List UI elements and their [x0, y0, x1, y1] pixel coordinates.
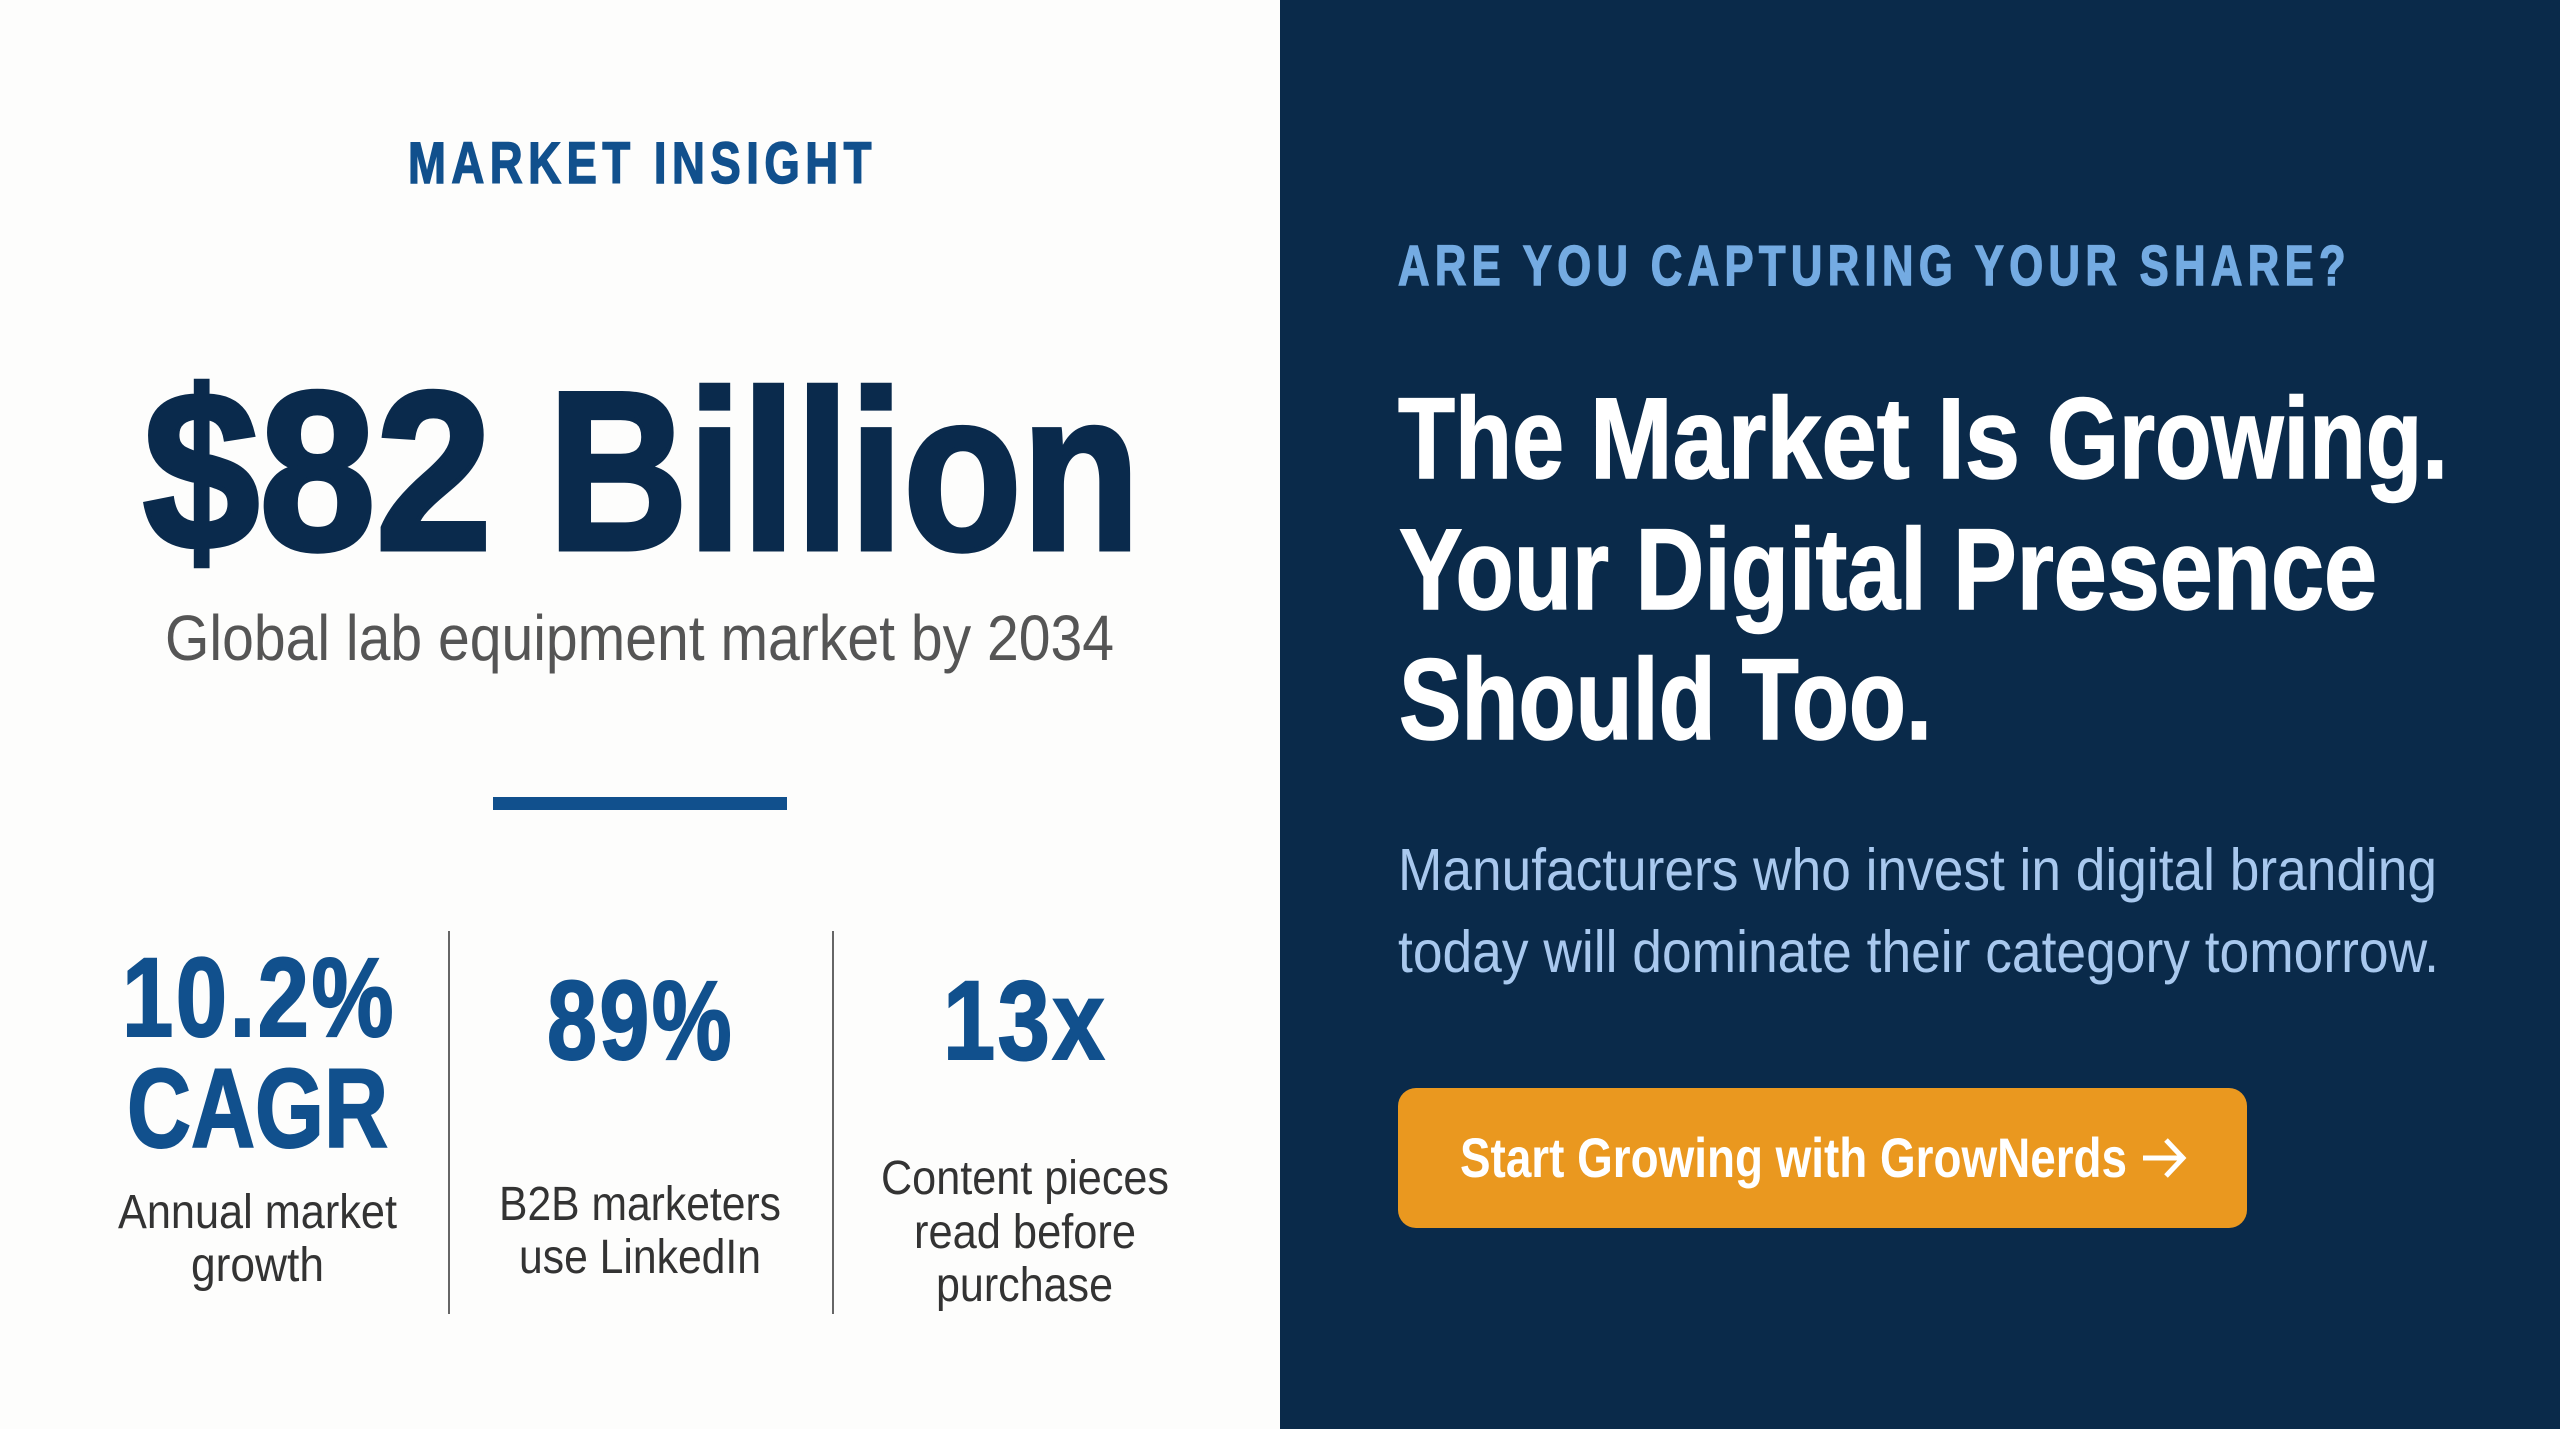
stat: 89%: [499, 958, 781, 1284]
subtitle: Global lab equipment market by 2034: [165, 602, 1114, 674]
stat label: [499, 1178, 781, 1284]
stat value: 89%: [547, 958, 734, 1083]
stat label: growth: [191, 1239, 324, 1292]
panel: call to action (right): [1280, 0, 2560, 1429]
panel: market insight (left): [0, 0, 1280, 1429]
heading: Growing.: [2047, 375, 2448, 503]
headline stat: $82 Billion: Billion: [548, 344, 1140, 597]
heading: Market Is: [1590, 375, 2020, 503]
stat label: purchase: [936, 1259, 1113, 1312]
accent divider: [493, 797, 787, 810]
stat value: CAGR: [127, 1046, 388, 1171]
body copy: [1398, 837, 2439, 985]
stat label: use LinkedIn: [519, 1231, 761, 1284]
heading: [1398, 375, 2448, 764]
stat label: read before: [914, 1206, 1136, 1259]
eyebrow: market insight: MARKET INSIGHT: [408, 131, 877, 196]
stat label: [118, 1186, 397, 1292]
button label: Start Growing with GrowNerds: [1460, 1126, 2127, 1189]
body copy: today will dominate their category tomorrow.: [1398, 919, 2439, 985]
CTA button: [1398, 1088, 2247, 1228]
stat label: [881, 1152, 1169, 1312]
icon: arrow: [2143, 1140, 2183, 1176]
headline stat: $82 Billion: [143, 344, 1140, 597]
stat label: Content pieces: [881, 1152, 1169, 1205]
heading: Should Too.: [1399, 636, 1932, 764]
stat value: 10.2%: [122, 935, 396, 1060]
headline stat: $82 Billion: $82: [143, 344, 492, 597]
heading: The: [1398, 375, 1564, 503]
stat label: Annual market: [118, 1186, 397, 1239]
stat: 13x: [881, 958, 1169, 1312]
stat: 10.2% CAGR: [118, 935, 397, 1292]
stat label: B2B marketers: [499, 1178, 781, 1231]
heading: Your Digital Presence: [1399, 506, 2377, 634]
body copy: Manufacturers who invest in digital branding: [1398, 837, 2437, 903]
stat value: 13x: [943, 958, 1107, 1083]
stat value: [122, 935, 396, 1171]
